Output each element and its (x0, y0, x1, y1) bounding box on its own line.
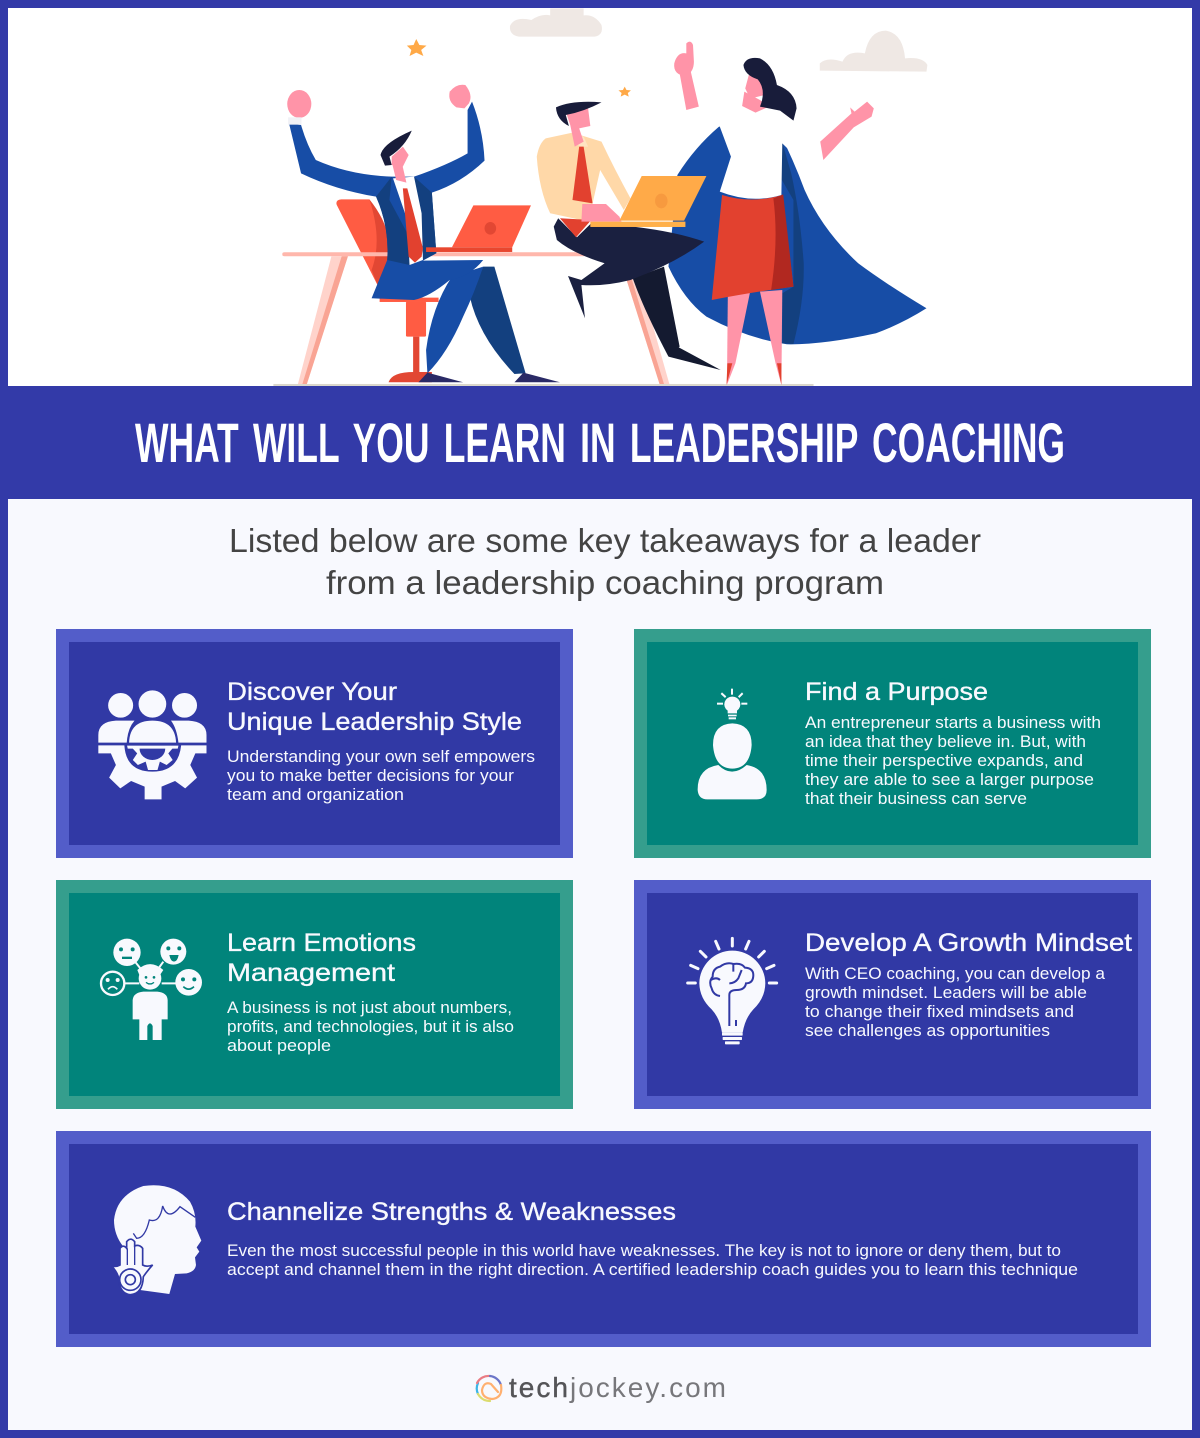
heading: Channelize Strengths & Weaknesses (227, 1198, 676, 1226)
heading: Find a Purpose (805, 678, 988, 706)
body text: accept and channel them in the right direction. A certified leadership coach guides you to learn this technique (227, 1261, 1078, 1279)
panel: develop a growth mindset (634, 880, 1151, 1109)
superhero cape (668, 126, 926, 344)
panel: discover your unique leadership style (56, 629, 573, 858)
man in cream shirt (537, 102, 721, 370)
panel: find a purpose (634, 629, 1151, 858)
body text: An entrepreneur starts a business with (805, 714, 1101, 732)
intro text: Listed below are some key takeaways for a leader (229, 522, 981, 559)
body text: to change their fixed mindsets and (805, 1003, 1074, 1021)
body text: With CEO coaching, you can develop a (805, 965, 1106, 983)
icon: person with lightbulb (698, 689, 767, 799)
icon: person with emotion faces (101, 939, 202, 1040)
heading: Develop A Growth Mindset (805, 929, 1132, 957)
heading (227, 678, 522, 736)
body text: Even the most successful people in this world have weaknesses. The key is not to ignore or deny them, but to (227, 1242, 1061, 1260)
body text: they are able to see a larger purpose (805, 771, 1094, 789)
floor line (273, 384, 814, 386)
heading: Unique Leadership Style (227, 708, 522, 736)
icon: logo rings (477, 1376, 501, 1401)
illustration: team of business people celebrating (273, 8, 927, 386)
icon: team on gear (98, 690, 206, 799)
body text (805, 965, 1106, 1040)
star: small (618, 87, 631, 97)
heading: Learn Emotions (227, 929, 416, 957)
icon: lightbulb with brain (688, 938, 777, 1044)
body text: profits, and technologies, but it is also (227, 1018, 514, 1036)
cloud: top (510, 8, 602, 37)
panel: learn emotions management (56, 880, 573, 1109)
laptop: orange (590, 176, 706, 227)
office chair (336, 199, 439, 382)
body text: see challenges as opportunities (805, 1022, 1050, 1040)
body text: that their business can serve (805, 790, 1027, 808)
intro text: from a leadership coaching program (326, 564, 884, 601)
laptop: red (426, 205, 531, 252)
panel: channelize strengths and weaknesses (56, 1131, 1151, 1347)
cloud: right (820, 31, 927, 72)
logo: techjockey.com (477, 1372, 726, 1403)
wordmark: techjockey.com (509, 1372, 726, 1403)
desk left leg (298, 256, 348, 384)
man in blue suit (287, 85, 560, 382)
body text: A business is not just about numbers, (227, 999, 512, 1017)
body text: about people (227, 1037, 331, 1055)
desk right leg (626, 278, 669, 384)
woman leader (674, 42, 874, 385)
body text (227, 1242, 1078, 1279)
heading (227, 929, 416, 987)
body text: you to make better decisions for your (227, 767, 515, 785)
body text: time their perspective expands, and (805, 752, 1083, 770)
heading: Management (227, 959, 395, 987)
intro text (229, 522, 981, 601)
body text (805, 714, 1101, 808)
body text: team and organization (227, 786, 404, 804)
body text: an idea that they believe in. But, with (805, 733, 1086, 751)
body text: Understanding your own self empowers (227, 748, 535, 766)
icon: head with hamsa hand (111, 1185, 201, 1295)
body text (227, 748, 535, 804)
body text: growth mindset. Leaders will be able (805, 984, 1087, 1002)
body text (227, 999, 514, 1055)
star: large (407, 39, 427, 56)
heading: Discover Your (227, 678, 397, 706)
desk top (282, 252, 586, 256)
